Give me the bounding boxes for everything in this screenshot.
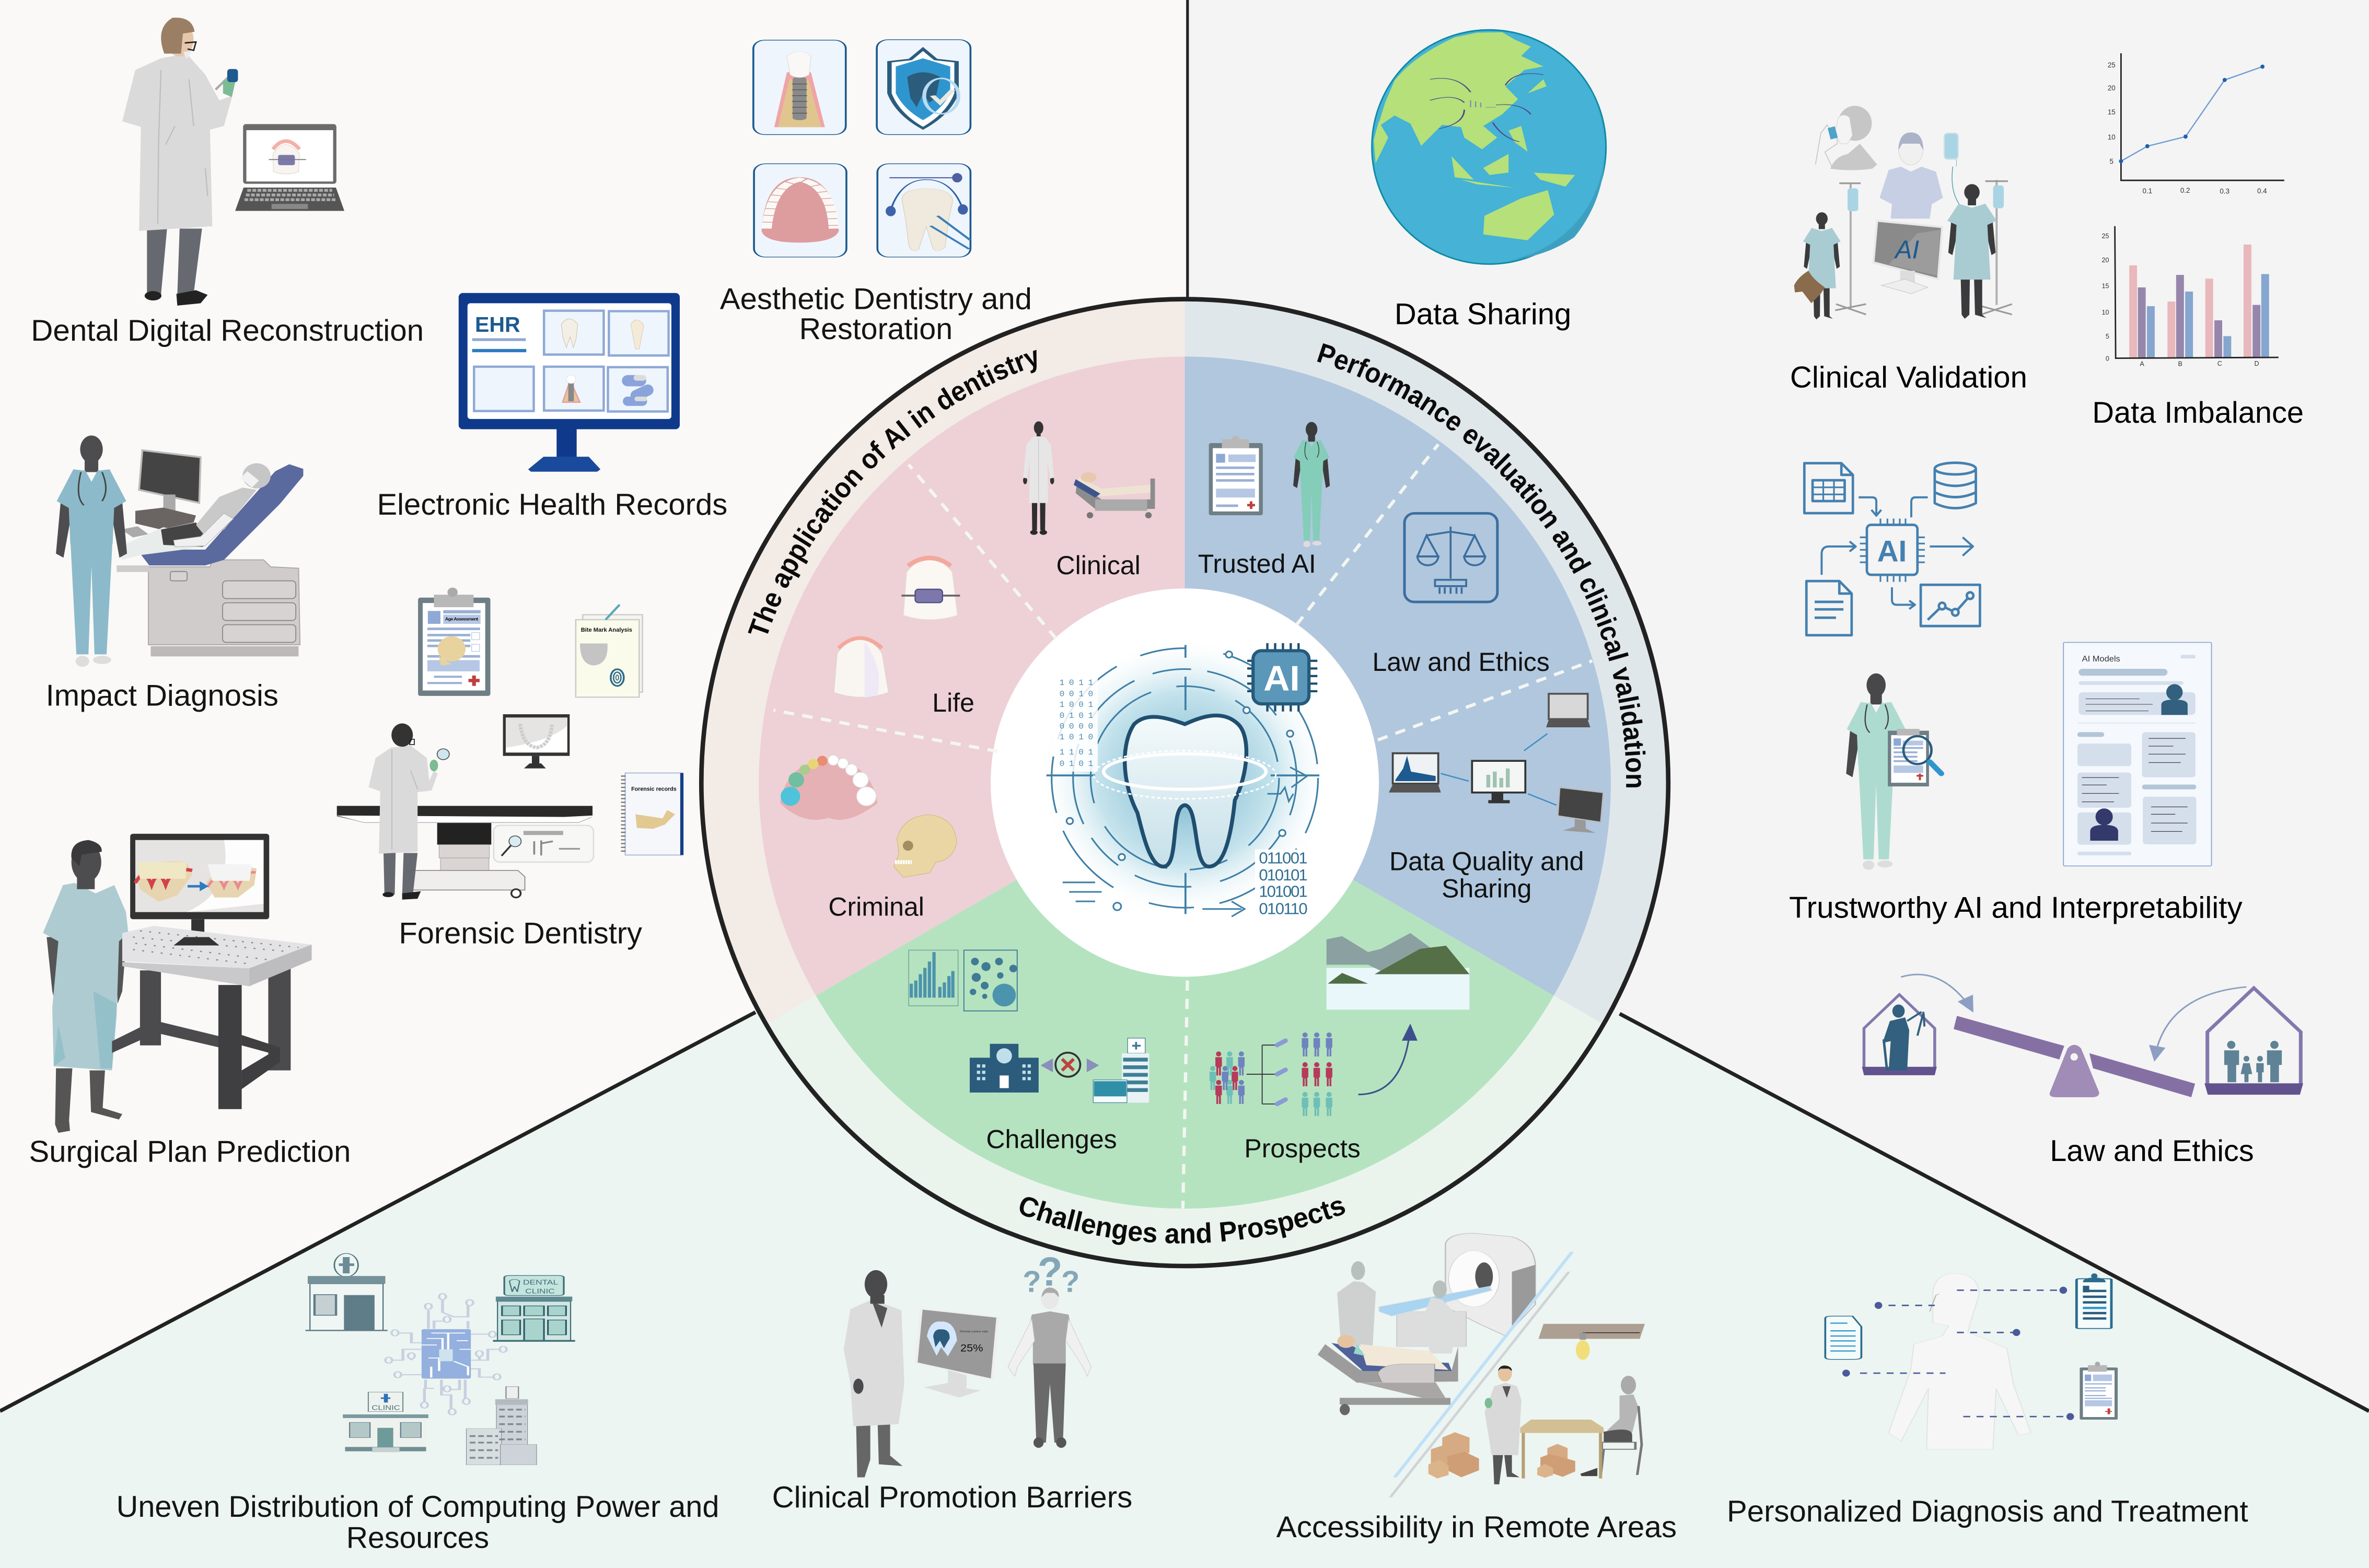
chart: line chart: 0.2 bbox=[2180, 187, 2190, 194]
label: Clinical Validation: Clinical Validation bbox=[1790, 361, 2027, 394]
chart: bar chart: 20 bbox=[2101, 257, 2109, 264]
icon: palate bbox=[754, 164, 846, 257]
central tooth AI illustration: 1 0 1 1 bbox=[1060, 678, 1093, 688]
icon: forensic records notebook bbox=[623, 773, 683, 855]
figure: clinical validation people bbox=[1794, 106, 2012, 319]
central tooth AI illustration: 010101 bbox=[1259, 866, 1308, 884]
icon: nurse bbox=[1293, 422, 1330, 547]
icon: skull bbox=[893, 815, 957, 877]
icon: hospital bbox=[306, 1253, 388, 1331]
icon: tooth shield bbox=[877, 40, 970, 135]
label: Aesthetic Dentistry and Restoration: Aesthetic Dentistry and bbox=[720, 282, 1032, 316]
label: Data Imbalance: Data Imbalance bbox=[2092, 396, 2304, 429]
chart: bar chart: 0 bbox=[2106, 355, 2109, 362]
icon: clinic bbox=[343, 1392, 428, 1452]
outer ring sector: application bbox=[701, 299, 1185, 1024]
globe bbox=[1372, 30, 1606, 264]
heading labels bbox=[29, 282, 2304, 1554]
central tooth AI illustration: 0 1 0 1 bbox=[1060, 759, 1093, 769]
label: Aesthetic Dentistry and Restoration bbox=[720, 282, 1032, 346]
ring title: performance: Performance evaluation and clinical validation bbox=[1317, 343, 1646, 787]
icon: laptops and monitors bbox=[1389, 694, 1604, 833]
icon: hospital and clinic bbox=[970, 1038, 1149, 1102]
central tooth AI illustration: 1 1 0 1 bbox=[1060, 748, 1093, 757]
chart: line chart: 0.1 bbox=[2142, 187, 2152, 195]
central tooth AI illustration bbox=[1039, 635, 1331, 921]
panel: AI models document: AI Models bbox=[2082, 655, 2120, 664]
icon: laptop with tooth bbox=[235, 124, 344, 211]
chart: line chart: 5 bbox=[2110, 157, 2113, 165]
figure: nurse at exam chair bbox=[56, 436, 303, 667]
label: Electronic Health Records: Electronic Health Records bbox=[377, 488, 727, 521]
label: Sharing: Sharing bbox=[1442, 874, 1532, 903]
icon: question marks: ? bbox=[1061, 1265, 1079, 1298]
icon: hospital bed bbox=[1318, 1335, 1458, 1415]
label: Personalized Diagnosis and Treatment: Personalized Diagnosis and Treatment bbox=[1727, 1495, 2248, 1528]
icon: clipboard bbox=[1209, 435, 1263, 515]
inner sector: pink bbox=[759, 356, 1185, 996]
central tooth AI illustration: 1 0 0 1 bbox=[1060, 700, 1093, 710]
icon: circuit chip bbox=[385, 1294, 506, 1415]
label: Impact Diagnosis: Impact Diagnosis bbox=[46, 679, 278, 712]
sector contents in shared coordinates bbox=[773, 421, 1604, 1209]
left top illustrations bbox=[56, 18, 680, 667]
central tooth AI illustration: 0 0 1 0 bbox=[1060, 690, 1093, 699]
icon: blue clipboard bbox=[2076, 1273, 2111, 1329]
divider: diagonal bbox=[1390, 1252, 1572, 1497]
icon: mountains and lake bbox=[1327, 933, 1469, 1009]
icon: patient clipboard bbox=[2080, 1362, 2118, 1420]
figure: forensic table and doctor bbox=[337, 724, 594, 900]
central tooth AI illustration: 101001 bbox=[1259, 882, 1308, 901]
icon: hospital tower bbox=[467, 1387, 537, 1465]
bottom left illustrations bbox=[306, 1253, 1091, 1477]
icon: age assessment clipboard: Age Assessment bbox=[445, 617, 478, 622]
inner sector: green bbox=[816, 783, 1554, 1209]
arrow: prospects rising bbox=[1358, 1024, 1418, 1095]
ring title: application: The application of AI in dentistry bbox=[748, 350, 1037, 634]
icon: question marks: ? bbox=[1038, 1249, 1062, 1295]
figure: staff near scanner bbox=[1337, 1261, 1458, 1353]
label: Forensic Dentistry: Forensic Dentistry bbox=[399, 916, 642, 950]
chart: bar chart: A bbox=[2140, 361, 2144, 368]
icon: EHR monitor: EHR bbox=[475, 312, 520, 336]
chart: bar chart bbox=[2101, 226, 2279, 368]
icon: tooth with instruments bbox=[877, 164, 970, 257]
icon: question marks bbox=[1023, 1249, 1079, 1298]
central circular diagram bbox=[699, 297, 1671, 1269]
top centre illustrations bbox=[753, 40, 970, 257]
label: Life: Life bbox=[932, 688, 974, 717]
label: Clinical: Clinical bbox=[1056, 551, 1141, 580]
icon: desk bbox=[1520, 1420, 1604, 1479]
icon: patient groups bbox=[1210, 1032, 1332, 1116]
chart: bar chart: C bbox=[2217, 360, 2222, 367]
figure: body torso bbox=[1888, 1273, 2031, 1449]
icon: AI data flow bbox=[1804, 463, 1980, 635]
figure: optical table bbox=[112, 926, 312, 1109]
central tooth AI illustration: 0 0 0 0 bbox=[1060, 722, 1093, 731]
figure: dental doctor bbox=[122, 18, 238, 306]
figure: nurse with clipboard bbox=[1846, 673, 1941, 870]
icon: bite mark analysis bbox=[576, 605, 643, 697]
figure: confused patient bbox=[1008, 1287, 1091, 1448]
icon: EHR monitor bbox=[459, 293, 680, 472]
chart: line chart: 0.3 bbox=[2220, 188, 2229, 195]
icon: AI monitor: AI bbox=[1894, 236, 1920, 264]
arrow: left curve bbox=[1901, 974, 1973, 1013]
icon: question marks: ? bbox=[1023, 1265, 1041, 1298]
right panel background bbox=[1184, 0, 2369, 1411]
chart: line chart: 20 bbox=[2108, 84, 2116, 92]
icon: bite mark analysis: Bite Mark Analysis bbox=[581, 626, 632, 633]
bottom right illustrations bbox=[1318, 1233, 2118, 1497]
icon: dental clinic bbox=[493, 1275, 575, 1342]
icon: hospital bed bbox=[1074, 472, 1155, 518]
icon: AI chip: AI bbox=[1263, 659, 1300, 699]
icon: AI chip bbox=[1247, 643, 1317, 712]
icon: boxes bbox=[1429, 1432, 1575, 1479]
label: Data Quality and: Data Quality and bbox=[1389, 847, 1584, 876]
chart: line chart: 15 bbox=[2108, 108, 2116, 116]
label: Surgical Plan Prediction: Surgical Plan Prediction bbox=[29, 1135, 351, 1169]
icon: monitor with arch bbox=[503, 714, 570, 769]
icon: forensic records notebook: Forensic records bbox=[631, 785, 677, 793]
label: Data Sharing: Data Sharing bbox=[1395, 298, 1571, 331]
inner sector: blue bbox=[1185, 356, 1611, 996]
central tooth AI illustration: 010110 bbox=[1259, 900, 1308, 917]
panel: AI models document bbox=[2063, 642, 2212, 866]
icon: seesaw bbox=[1954, 1016, 2195, 1097]
icon: implant bbox=[753, 40, 846, 135]
icon: clinic: CLINIC bbox=[371, 1404, 400, 1412]
figure: doctor with patient bbox=[1485, 1365, 1642, 1484]
label: Criminal: Criminal bbox=[828, 892, 924, 921]
label: Uneven Distribution of Computing Power and Resources: Uneven Distribution of Computing Power and bbox=[117, 1490, 719, 1524]
label: Law and Ethics: Law and Ethics bbox=[2050, 1134, 2254, 1168]
icon: monitor with tooth stat: 25% bbox=[960, 1343, 983, 1354]
icon: CT scanner bbox=[1379, 1233, 1535, 1346]
chart: bar chart: D bbox=[2255, 360, 2259, 367]
icon: age assessment clipboard bbox=[418, 588, 490, 696]
chart: bar chart: 10 bbox=[2101, 309, 2109, 316]
arrow: right curve bbox=[2149, 987, 2246, 1062]
icon: document bbox=[1825, 1316, 1861, 1360]
chart: line chart bbox=[2108, 53, 2284, 195]
chart: bar chart: B bbox=[2178, 361, 2182, 368]
chart: bar chart: 15 bbox=[2101, 283, 2109, 290]
icon: family house bbox=[2204, 988, 2303, 1095]
icon: monitor with tooth stat bbox=[916, 1309, 998, 1398]
icon: operation planning monitor bbox=[130, 834, 269, 938]
chart: line chart: 25 bbox=[2108, 61, 2116, 69]
chart: line chart: 10 bbox=[2108, 133, 2116, 141]
label: Accessibility in Remote Areas: Accessibility in Remote Areas bbox=[1276, 1511, 1677, 1544]
figure: doctor at barrier bbox=[844, 1270, 904, 1477]
right top illustrations: AI bbox=[1877, 535, 1907, 568]
icon: charts bbox=[909, 950, 1017, 1011]
label: Trusted AI: Trusted AI bbox=[1198, 549, 1316, 578]
icon: dental arch bbox=[780, 755, 877, 820]
label: Clinical Promotion Barriers: Clinical Promotion Barriers bbox=[772, 1481, 1132, 1514]
chart: bar chart: 5 bbox=[2106, 333, 2109, 340]
sector labels bbox=[828, 549, 1584, 1163]
central tooth AI illustration: 1 0 1 0 bbox=[1060, 733, 1093, 742]
central tooth AI illustration: 011001 bbox=[1259, 849, 1308, 867]
label: Challenges: Challenges bbox=[986, 1125, 1117, 1154]
outer ring sector: challenges bbox=[766, 783, 1604, 1266]
icon: law house bbox=[1862, 995, 1937, 1075]
bottom panel background bbox=[0, 783, 2369, 1568]
icon: clinical doctor bbox=[1023, 421, 1054, 535]
chart: line chart: 0.4 bbox=[2257, 187, 2267, 195]
icon: ceiling lamp bbox=[1539, 1324, 1645, 1360]
chart: bar chart: 25 bbox=[2101, 233, 2109, 240]
icon: dental clinic: CLINIC bbox=[525, 1287, 555, 1295]
label: Aesthetic Dentistry and Restoration: Restoration bbox=[799, 312, 953, 346]
label: Uneven Distribution of Computing Power and Resources: Resources bbox=[346, 1521, 489, 1554]
icon: AI monitor bbox=[1874, 221, 1942, 294]
lines: dotted connectors bbox=[1842, 1287, 2074, 1420]
left middle illustrations bbox=[43, 588, 683, 1133]
right lower illustrations bbox=[1846, 642, 2303, 1097]
icon: monitor with tooth stat: Dental caries rate bbox=[960, 1330, 988, 1333]
icon: tooth with bracket bbox=[901, 558, 960, 620]
icon: tooth crown bbox=[834, 638, 889, 698]
label: Prospects: Prospects bbox=[1244, 1134, 1361, 1163]
right top illustrations bbox=[1794, 53, 2284, 635]
outer ring sector: performance bbox=[1185, 299, 1668, 1024]
central tooth AI illustration: 0 1 0 1 bbox=[1060, 711, 1093, 721]
icon: dental clinic: DENTAL bbox=[523, 1279, 558, 1286]
icon: scales of justice bbox=[1404, 513, 1497, 602]
label: Dental Digital Reconstruction: Dental Digital Reconstruction bbox=[31, 314, 424, 347]
ring title: challenges: Challenges and Prospects bbox=[1020, 1197, 1345, 1245]
figure: patient in gown bbox=[43, 840, 129, 1133]
label: Trustworthy AI and Interpretability: Trustworthy AI and Interpretability bbox=[1789, 891, 2243, 925]
label: Law and Ethics: Law and Ethics bbox=[1373, 647, 1550, 677]
label: Uneven Distribution of Computing Power and Resources bbox=[117, 1490, 719, 1554]
